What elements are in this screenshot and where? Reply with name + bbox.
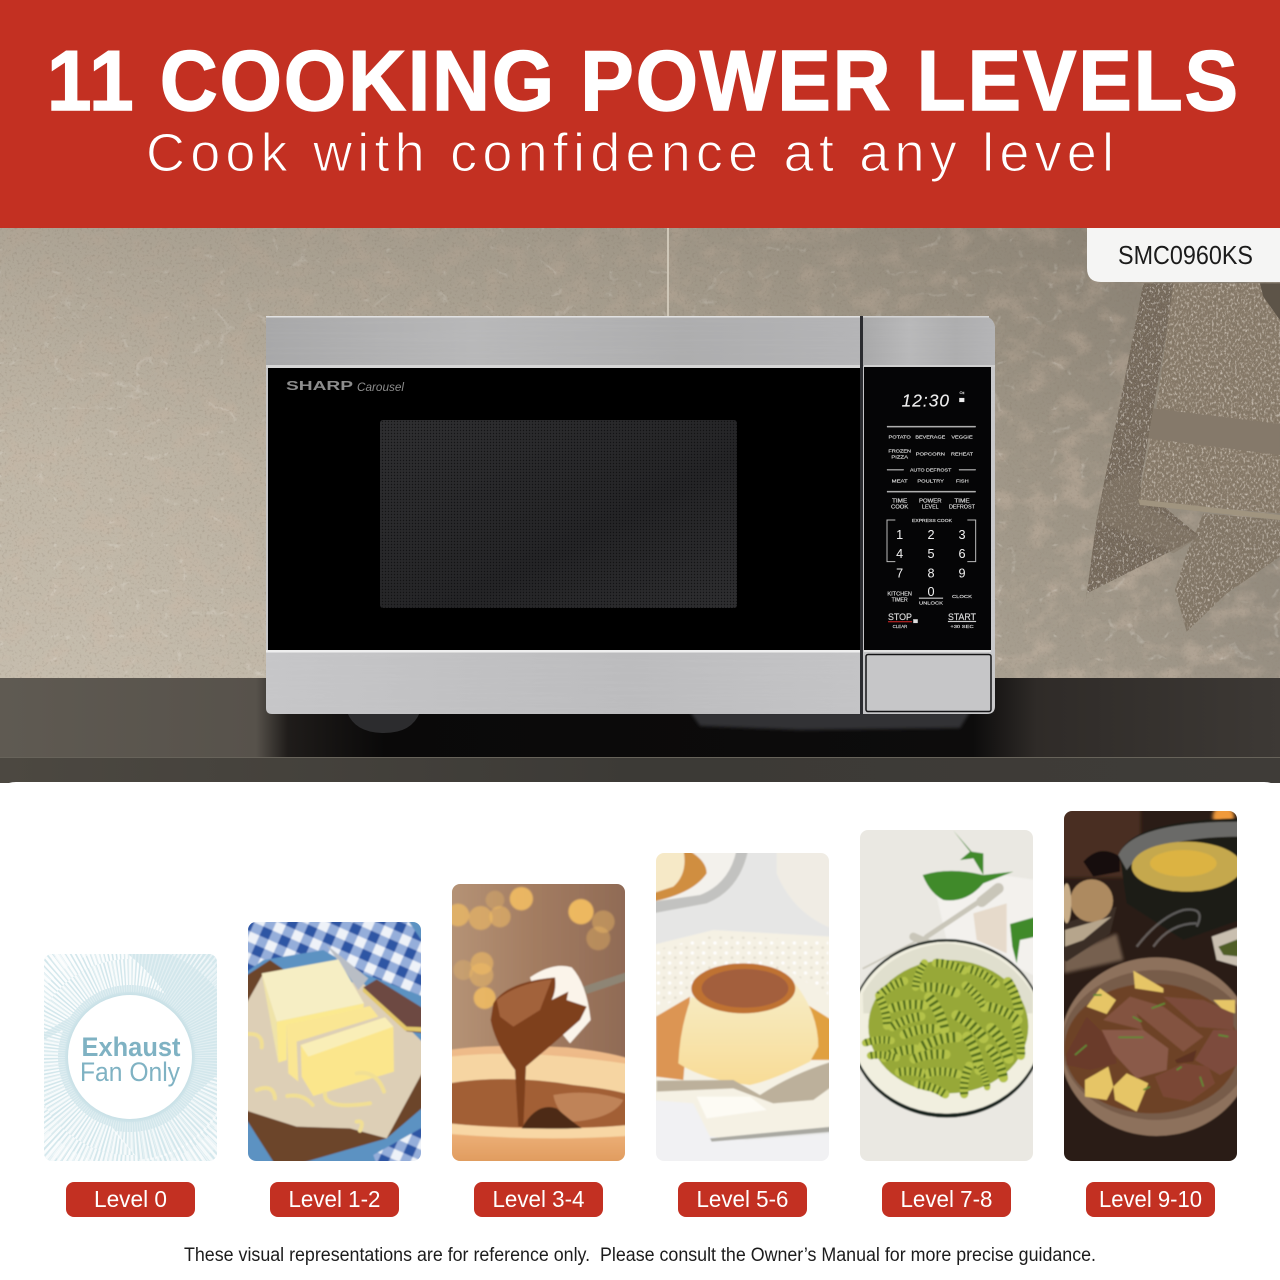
footnote: These visual representations are for reference only. Please consult the Owner’s Manual for more precise guidance. xyxy=(184,1245,1096,1266)
panel: keypad labels: BEVERAGE xyxy=(915,434,946,440)
logo: SHARP xyxy=(286,378,353,393)
panel: keypad labels: STOP xyxy=(888,612,912,622)
napkin xyxy=(653,1100,832,1164)
panel: keypad labels: DEFROST xyxy=(949,504,976,510)
fusilli pasta xyxy=(865,961,1023,1094)
number keys: 9 xyxy=(958,566,966,580)
panel: keypad labels: +30 SEC xyxy=(950,624,974,629)
chocolate coating xyxy=(491,977,587,1127)
card: level 1-2 butter xyxy=(245,919,424,1164)
potato chunks xyxy=(1085,971,1235,1112)
swirl blade: bottom right xyxy=(114,1075,217,1161)
white panel xyxy=(0,782,1280,1280)
pill: level 3-4 xyxy=(474,1182,603,1217)
towel: left flap xyxy=(1085,283,1200,607)
flan caramel top xyxy=(691,963,795,1013)
hub label: Exhaust xyxy=(82,1032,180,1062)
pill: level 9-10 xyxy=(1086,1182,1215,1217)
small herb bowl xyxy=(1212,927,1240,967)
model tag: SMC0960KS xyxy=(1118,240,1253,270)
card: level 7-8 pesto pasta xyxy=(860,830,1033,1161)
panel: keypad labels: TIME xyxy=(954,499,970,505)
melted chocolate pool xyxy=(449,1079,628,1128)
flan body xyxy=(678,983,818,1085)
pill: level 9-10: Level 9-10 xyxy=(1099,1186,1202,1212)
radial dotted spokes xyxy=(44,954,217,1161)
towel: main fold xyxy=(1138,283,1280,513)
herbs xyxy=(1075,995,1228,1090)
number keys: 4 xyxy=(896,547,903,561)
panel: keypad labels: POPCORN xyxy=(916,452,945,458)
knife xyxy=(327,945,424,1033)
number keys: 8 xyxy=(927,566,935,580)
level pills xyxy=(66,1182,1215,1217)
door release button xyxy=(866,654,991,712)
pill: level 7-8 xyxy=(882,1182,1011,1217)
marshmallow xyxy=(530,966,591,1043)
number keys: 1 xyxy=(896,528,903,542)
cast iron pot xyxy=(1083,818,1242,940)
butter blocks xyxy=(262,959,394,1096)
napkin xyxy=(937,873,1036,977)
towel: back right flap xyxy=(1175,513,1280,632)
clock display: 12:30 xyxy=(902,391,949,411)
pill: level 3-4: Level 3-4 xyxy=(492,1186,585,1212)
panel: keypad labels: POTATO xyxy=(888,434,911,440)
basil leaves xyxy=(923,831,1036,963)
panel: keypad labels: POULTRY xyxy=(917,479,945,485)
towel hanging on the wall xyxy=(1085,283,1280,632)
bokeh lights xyxy=(447,887,615,1009)
panel: keypad labels xyxy=(887,390,976,630)
panel: keypad labels: CLEAR xyxy=(893,624,908,630)
panel: keypad labels: LEVEL xyxy=(922,504,939,510)
lace dish top right xyxy=(778,853,829,926)
title: 11 COOKING POWER LEVELS xyxy=(47,33,1238,129)
number keys: 5 xyxy=(927,547,935,561)
swirl blade: top left xyxy=(44,954,166,1032)
background: dark shelf xyxy=(0,678,1280,783)
number keys: 7 xyxy=(896,566,903,580)
panel: keypad labels: EXPRESS COOK xyxy=(912,518,953,523)
fork xyxy=(863,888,998,986)
bowl xyxy=(449,1046,628,1164)
hub label: Fan Only xyxy=(80,1057,180,1087)
potatoes and basket xyxy=(1062,879,1117,962)
panel: keypad labels: KITCHEN xyxy=(887,591,912,597)
number keys: 3 xyxy=(958,528,966,542)
control panel xyxy=(864,365,995,652)
butter curls xyxy=(249,1034,384,1131)
background dish xyxy=(653,849,748,913)
number keys: 2 xyxy=(927,528,935,542)
gingham cloth xyxy=(245,919,424,997)
card: level 0 exhaust fan xyxy=(44,954,217,1161)
pill: level 7-8: Level 7-8 xyxy=(900,1186,992,1212)
pill: level 0 xyxy=(66,1182,195,1217)
stew plate xyxy=(1060,957,1253,1136)
parchment xyxy=(245,973,424,1138)
model tag xyxy=(1087,228,1280,282)
background: stone wall xyxy=(0,228,1280,680)
spoon xyxy=(657,1062,832,1103)
header band xyxy=(0,0,1280,228)
panel: keypad labels: Oz xyxy=(959,390,965,395)
card: level 3-4 chocolate xyxy=(447,881,628,1164)
subtitle: Cook with confidence at any level xyxy=(146,123,1114,183)
logo xyxy=(286,378,404,394)
panel: keypad labels: VEGGIE xyxy=(951,434,973,440)
microwave window mesh xyxy=(380,420,737,608)
panel: keypad labels: AUTO DEFROST xyxy=(910,467,951,473)
panel: keypad labels: START xyxy=(948,612,976,622)
microwave feet xyxy=(347,712,970,733)
blurred backdrop xyxy=(1061,806,1234,973)
beef chunks xyxy=(1067,997,1240,1102)
caramel sauce xyxy=(656,997,690,1080)
panel: keypad labels: MEAT xyxy=(892,479,908,485)
number keys: 6 xyxy=(958,547,966,561)
pill: level 5-6 xyxy=(678,1182,807,1217)
pill: level 1-2: Level 1-2 xyxy=(288,1186,380,1212)
card: level 9-10 beef stew xyxy=(1060,806,1253,1164)
panel: keypad labels: COOK xyxy=(891,504,909,510)
number keys xyxy=(896,528,966,599)
steam xyxy=(1137,910,1200,947)
logo: Carousel xyxy=(357,382,404,394)
wooden board xyxy=(245,960,424,1164)
lace plate xyxy=(653,930,832,1139)
panel: keypad labels: REHEAT xyxy=(951,452,973,458)
fan hub circle xyxy=(67,994,193,1120)
microwave xyxy=(266,316,995,733)
panel: keypad labels: POWER xyxy=(919,499,942,505)
microwave door glass xyxy=(268,368,860,650)
card: level 5-6 flan xyxy=(653,849,832,1164)
panel: keypad labels: FISH xyxy=(956,479,969,485)
pill: level 5-6: Level 5-6 xyxy=(696,1186,788,1212)
pill: level 1-2 xyxy=(270,1182,399,1217)
towel: woven bands xyxy=(1097,408,1280,553)
panel: keypad labels: UNLOCK xyxy=(919,601,944,607)
panel: keypad labels: PIZZA xyxy=(891,455,909,461)
microwave steel body xyxy=(266,316,995,714)
number keys: 0 xyxy=(927,585,935,599)
bowl front rim xyxy=(449,1123,628,1138)
panel: keypad labels: TIME xyxy=(892,499,908,505)
swirl blade: bottom left xyxy=(44,1029,140,1161)
panel: keypad labels: FROZEN xyxy=(888,448,911,454)
plate xyxy=(849,939,1044,1118)
hub label xyxy=(82,1036,180,1086)
panel: keypad labels: CLOCK xyxy=(952,594,973,600)
fork tine xyxy=(583,972,628,994)
pill: level 0: Level 0 xyxy=(94,1186,167,1212)
panel: keypad labels: TIMER xyxy=(892,597,908,603)
